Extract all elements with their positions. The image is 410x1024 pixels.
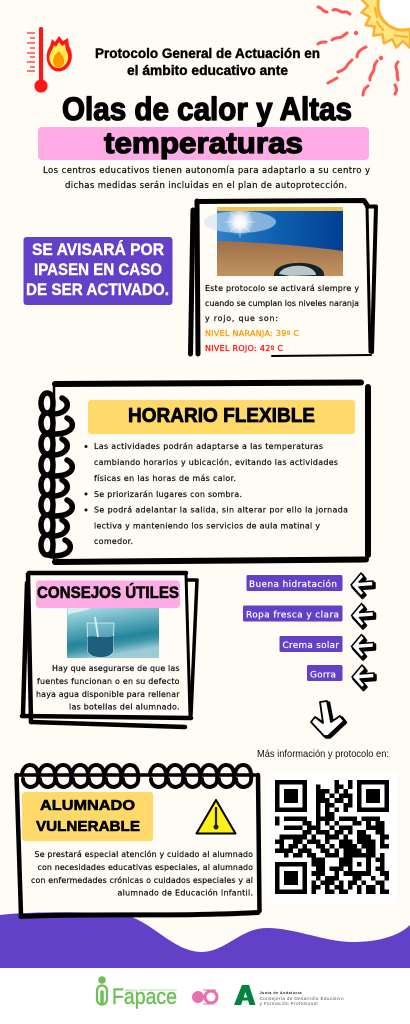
logo: junta de andalucia: Consejería de Desarrollo Educativo [260, 996, 344, 1001]
spiral binding [22, 765, 251, 787]
arrow: sunscreen [352, 634, 375, 660]
text: vulnerable students: con enfermedades crónicas o cuidados especiales y al [31, 875, 253, 885]
title: Olas de calor y Altas [62, 91, 352, 127]
heading: alumnado vulnerable: VULNERABLE [36, 818, 140, 835]
heading: subtitle: Protocolo General de Actuación en [95, 46, 320, 61]
logo: junta de andalucia: y Formación Profesional [260, 1001, 318, 1006]
text: fountains advice: haya agua disponible para rellenar [36, 690, 180, 699]
intro text [43, 166, 370, 191]
tip: clothes: Ropa fresca y clara [246, 610, 339, 620]
panel: protocol activation [190, 200, 376, 356]
icon: warning triangle [196, 800, 236, 834]
panel: horario flexible [41, 382, 368, 562]
intro text: dichas medidas serán incluidas en el plan de autoprotección. [65, 180, 347, 191]
heading: consejos utiles [36, 580, 180, 608]
panel: alumnado vulnerable [16, 765, 260, 916]
tip: cap: Gorra [310, 670, 336, 680]
callout: ipasen: DE SER ACTIVADO. [26, 281, 169, 299]
text: vulnerable students: con necesidades educativas especiales, al alumnado [38, 863, 253, 872]
bullet list [84, 442, 348, 546]
text: activation conditions [205, 284, 359, 323]
title highlight: temperaturas [104, 127, 303, 160]
heading: alumnado vulnerable: ALUMNADO [40, 797, 135, 814]
logo: junta de andalucia: Junta de Andalucía [260, 991, 302, 995]
intro text: Los centros educativos tienen autonomía para adaptarlo a su centro y [43, 166, 370, 176]
arrow: hydration [351, 573, 374, 598]
text: fountains advice: fuentes funcionan o en su defecto [37, 677, 180, 686]
logo: pink partner [192, 990, 217, 1004]
icon: sun [362, 0, 410, 48]
heading: subtitle: el ámbito educativo ante [127, 63, 288, 78]
arrow: down to qr [311, 701, 346, 738]
icon: sun rays [318, 7, 398, 95]
tip: sunscreen: Crema solar [282, 641, 339, 651]
heading: subtitle [95, 46, 320, 78]
icon: flame [47, 36, 72, 72]
heading: horario flexible: HORARIO FLEXIBLE [128, 404, 315, 427]
bullet list: Se podrá adelantar la salida, sin alterar por ello la jornada [94, 506, 348, 514]
bullet list: Las actividades podrán adaptarse a las temperaturas [94, 442, 323, 451]
image: desert with melting clock [204, 207, 343, 276]
text: more information: Más información y protocolo en: [257, 748, 389, 760]
title highlight [38, 127, 369, 160]
panel: consejos utiles [22, 573, 197, 727]
bullet list: lectiva y manteniendo los servicios de aula matinal y [94, 522, 320, 530]
icon: thermometer [27, 29, 49, 94]
logo: fapace: Fapace [112, 984, 177, 1009]
heading: alumnado vulnerable [22, 792, 153, 841]
callout: ipasen: SE AVISARÁ POR [32, 240, 164, 259]
text: activation conditions: Este protocolo se activará siempre y [205, 284, 359, 293]
text: vulnerable students: alumnado de Educación Infantil. [118, 888, 253, 898]
image: water glass [67, 608, 159, 658]
logo: fapace [97, 976, 177, 1009]
heading: consejos utiles: CONSEJOS ÚTILES [37, 583, 179, 602]
text: vulnerable students: Se prestará especial atención y cuidado al alumnado [34, 849, 253, 859]
tip: hydration: Buena hidratación [249, 579, 337, 590]
bullet list: cambiando horarios y ubicación, evitando las actividades [94, 457, 338, 467]
callout: ipasen: IPASEN EN CASO [34, 261, 162, 279]
heading: horario flexible [88, 400, 355, 434]
arrow: cap [352, 665, 376, 690]
text: fountains advice: Hay que asegurarse de que las [52, 664, 180, 673]
bullet list: comedor. [94, 537, 133, 546]
callout: ipasen [24, 237, 172, 305]
footer band [0, 968, 410, 1024]
purple wave background [0, 912, 410, 968]
qr code [266, 772, 397, 903]
text: activation conditions: y rojo, que son: [205, 314, 278, 323]
text: orange level: NIVEL NARANJA: 39º C [205, 329, 299, 338]
bullet list: Se priorizarán lugares con sombra. [94, 490, 242, 499]
logo: junta de andalucia [234, 985, 344, 1006]
bullet list: físicas en las horas de más calor. [94, 474, 236, 483]
text: vulnerable students [31, 849, 253, 898]
arrow: clothes [352, 604, 375, 628]
text: activation conditions: cuando se cumplan los niveles naranja [205, 299, 359, 308]
logo: fapace: Almería [125, 988, 137, 992]
text: fountains advice [36, 664, 180, 712]
tips list [243, 573, 376, 690]
spiral binding [41, 393, 72, 556]
text: red level: NIVEL ROJO: 42º C [205, 344, 283, 353]
text: fountains advice: las botellas del alumnado. [69, 702, 180, 712]
